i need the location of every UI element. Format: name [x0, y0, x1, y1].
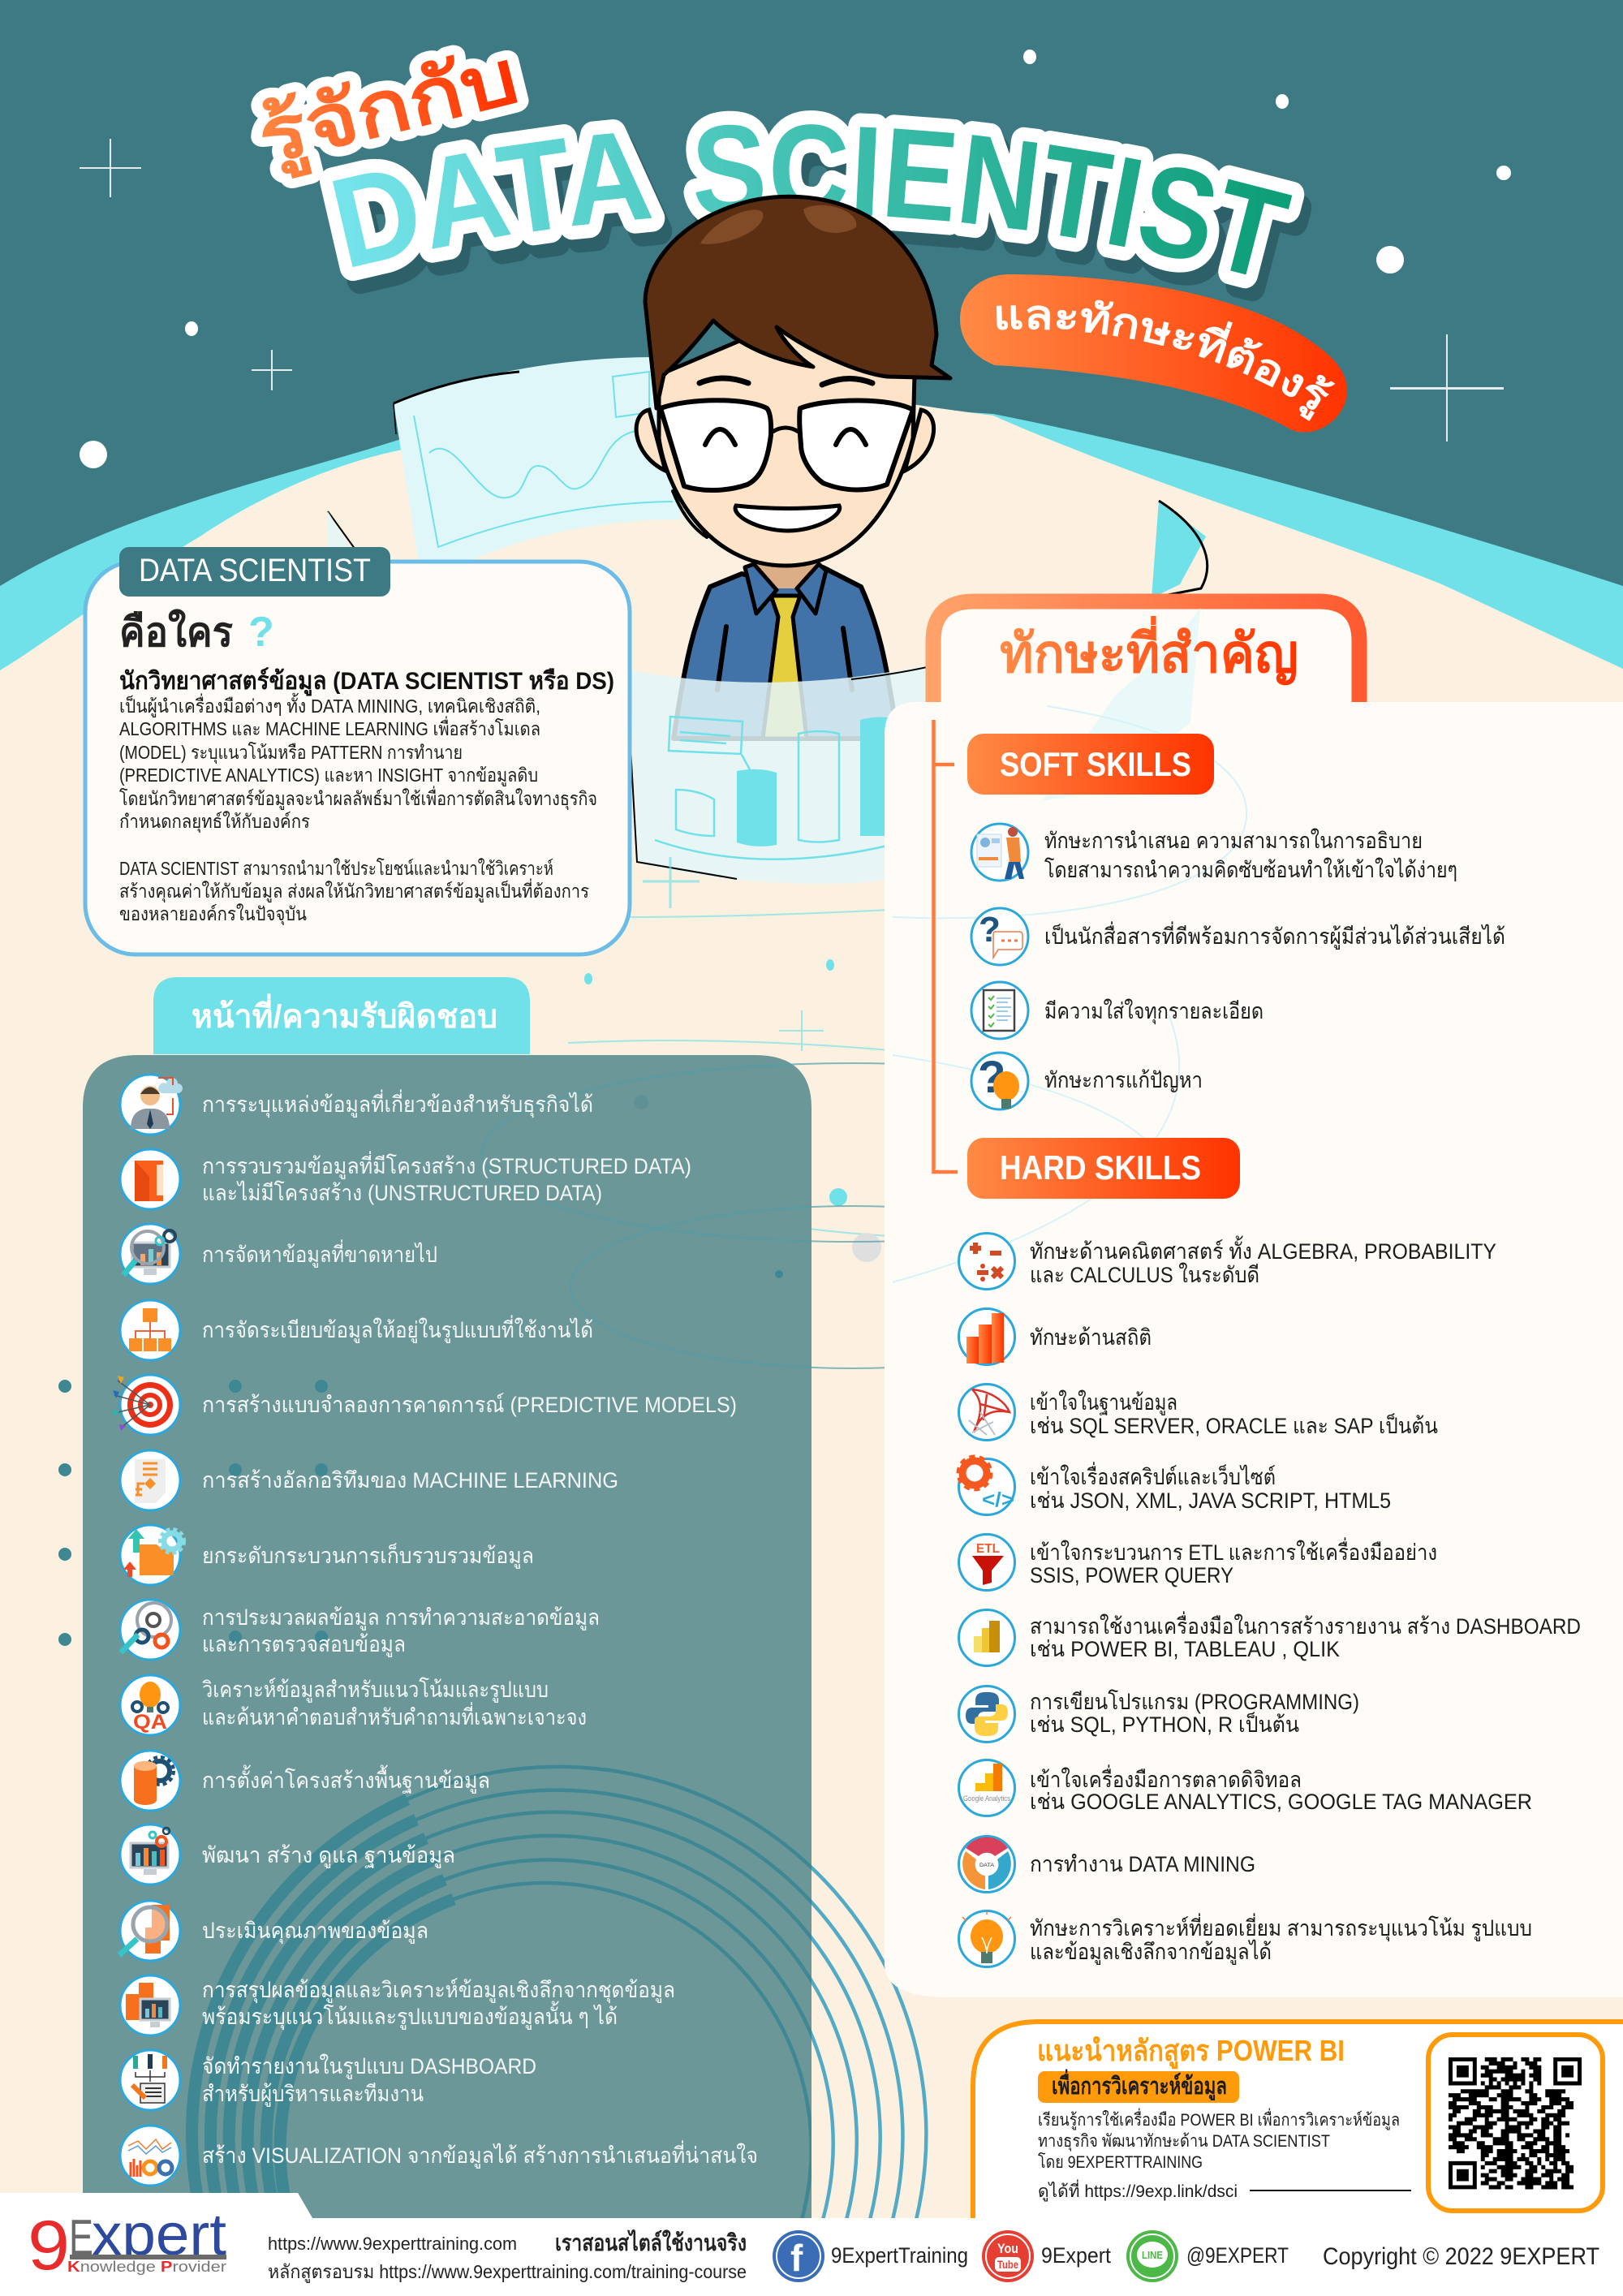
- thin ellipses: [482, 1063, 1222, 1368]
- panel: who is a data scientist: [85, 547, 630, 954]
- body text: DATA SCIENTIST สามารถนำมาใช้ประโยชน์และนำมาใช้วิเคราะห์: [119, 858, 553, 879]
- text: presentation skill: [1044, 828, 1457, 882]
- duty 13: การสรุปผลข้อมูลและวิเคราะห์ข้อมูลเชิงลึกจากชุดข้อมูล: [202, 1977, 675, 2004]
- body text: (MODEL) ระบุแนวโน้มหรือ PATTERN การทำนาย: [119, 742, 463, 764]
- promo text: [1038, 2108, 1400, 2202]
- character: data scientist: [636, 196, 950, 739]
- collar: [745, 564, 826, 614]
- youtube: You: [997, 2241, 1018, 2256]
- text: ETL: SSIS, POWER QUERY: [1030, 1563, 1233, 1587]
- panel: who is a data scientist: DATA SCIENTIST: [139, 553, 371, 588]
- soft skills pill: [967, 734, 1214, 795]
- duty 5: การสร้างแบบจำลองการคาดการณ์ (PREDICTIVE MODELS): [202, 1392, 737, 1417]
- duty 7: ยกระดับกระบวนการเก็บรวบรวมข้อมูล: [202, 1541, 534, 1569]
- facebook: 9ExpertTraining: [831, 2243, 968, 2268]
- duty 2: และไม่มีโครงสร้าง (UNSTRUCTURED DATA): [202, 1181, 602, 1205]
- duty 5: [113, 1375, 737, 1435]
- tag: [119, 547, 390, 597]
- text: digital marketing: [1030, 1764, 1532, 1814]
- icon: statistics bars: [959, 1308, 1014, 1365]
- logo: xpert: [92, 2203, 226, 2268]
- text: script: เข้าใจเรื่องสคริปต์และเว็บไซต์: [1030, 1462, 1276, 1489]
- text: script: เช่น JSON, XML, JAVA SCRIPT, HTML5: [1030, 1488, 1391, 1513]
- duty 14: [120, 2050, 536, 2110]
- soft skills pill: SOFT SKILLS: [1000, 745, 1191, 783]
- bars: [737, 769, 777, 846]
- duty 7: [120, 1525, 534, 1585]
- stars and dots: [80, 50, 1511, 468]
- panel: Power BI course promo: เพื่อการวิเคราะห์ข้อมูล: [1052, 2069, 1227, 2100]
- icon: light bulb: [959, 1910, 1014, 1967]
- shirt: [674, 567, 898, 739]
- note: [655, 717, 925, 859]
- promo text: ดูได้ที่ https://9exp.link/dsci: [1038, 2179, 1238, 2202]
- title: DATA SCIENTIST: SCIENTIST: [683, 110, 1305, 289]
- text: database: [1030, 1389, 1438, 1438]
- icon: python: [959, 1686, 1014, 1742]
- eyes and brows: [705, 429, 866, 445]
- hair: [645, 196, 950, 408]
- icon: ETL funnel: ETL: [976, 1542, 1000, 1556]
- nose bridge: [773, 428, 799, 432]
- pale glass reflection: [893, 608, 1246, 1282]
- youtube: Tube: [997, 2258, 1018, 2271]
- subheading: นักวิทยาศาสตร์ข้อมูล (DATA SCIENTIST หรือ DS): [119, 667, 614, 696]
- duty 4: [120, 1300, 593, 1360]
- logo: 9: [28, 2207, 70, 2285]
- sleeves: [717, 627, 852, 690]
- hard skills pill: [967, 1138, 1240, 1199]
- icon: gear code: </>: [982, 1488, 1014, 1511]
- hard skills pill: HARD SKILLS: [1000, 1148, 1201, 1187]
- text: programming: [1030, 1690, 1359, 1737]
- logo: Knowledge Provider: [67, 2259, 226, 2275]
- duty 6: [120, 1450, 618, 1510]
- ribbon: และทักษะที่ต้องรู้: และทักษะที่ต้องรู้: [997, 300, 1336, 421]
- duty 14: สำหรับผู้บริหารและทีมงาน: [202, 2082, 424, 2107]
- rings on teal: [407, 1764, 812, 2218]
- footer: [0, 2193, 1623, 2296]
- face: [659, 321, 915, 566]
- duty 2: การรวบรวมข้อมูลที่มีโครงสร้าง (STRUCTURED DATA): [202, 1151, 691, 1179]
- text: data mining: การทำงาน DATA MINING: [1030, 1852, 1255, 1876]
- text: database: เช่น SQL SERVER, ORACLE และ SAP เป็นต้น: [1030, 1411, 1438, 1438]
- icon: Power BI: [959, 1610, 1014, 1665]
- icon: question bulb: ?: [978, 1051, 1005, 1102]
- text: ETL: เข้าใจกระบวนการ ETL และการใช้เครื่องมืออย่าง: [1030, 1537, 1437, 1565]
- text: analytical skills: และข้อมูลเชิงลึกจากข้อมูลได้: [1030, 1940, 1272, 1965]
- youtube: 9Expert: [1041, 2243, 1111, 2268]
- text: digital marketing: เช่น GOOGLE ANALYTICS, GOOGLE TAG MANAGER: [1030, 1790, 1532, 1814]
- title: DATA SCIENTIST: DATA: [347, 136, 672, 294]
- text: ETL: [1030, 1537, 1437, 1587]
- facebook: f: [790, 2237, 803, 2279]
- text: statistics: ทักษะด้านสถิติ: [1030, 1325, 1152, 1350]
- duty 15: สร้าง VISUALIZATION จากข้อมูลได้ สร้างการนำเสนอที่น่าสนใจ: [202, 2140, 758, 2169]
- icon: SQL server: [959, 1385, 1014, 1440]
- decorative thin lines: [568, 857, 1242, 1238]
- duty 10: [120, 1751, 490, 1811]
- text: math: [1030, 1235, 1496, 1287]
- glasses: [661, 400, 913, 490]
- cyan dome: [0, 405, 1623, 730]
- body text: ของหลายองค์กรในปัจจุบัน: [119, 903, 307, 925]
- promo text: โดย 9EXPERTTRAINING: [1038, 2152, 1203, 2172]
- duties panel with rings: [58, 1055, 1222, 2220]
- facebook: [773, 2230, 968, 2282]
- copyright: Copyright © 2022 9EXPERT: [1323, 2243, 1599, 2270]
- icon: Google Analytics: Google Analytics: [963, 1794, 1010, 1803]
- body text: โดยนักวิทยาศาสตร์ข้อมูลจะนำผลลัพธ์มาใช้เพื่อการตัดสินใจทางธุรกิจ: [119, 786, 597, 810]
- text: reports: สามารถใช้งานเครื่องมือในการสร้างรายงาน สร้าง DASHBOARD: [1030, 1611, 1581, 1639]
- icon: notebook: [971, 982, 1028, 1039]
- text: digital marketing: เข้าใจเครื่องมือการตลาดดิจิทอล: [1030, 1764, 1302, 1792]
- promo title: แนะนำหลักสูตร POWER BI: [1037, 2034, 1345, 2070]
- duty 12: ประเมินคุณภาพของข้อมูล: [202, 1919, 428, 1945]
- duty 4: การจัดระเบียบข้อมูลให้อยู่ในรูปแบบที่ใช้งานได้: [202, 1315, 593, 1343]
- QR box: [1428, 2035, 1603, 2211]
- duty 8: และการตรวจสอบข้อมูล: [202, 1632, 406, 1657]
- glass chart overlay: [631, 662, 941, 884]
- duty 2: [120, 1149, 691, 1209]
- thick ring arcs: [192, 1799, 454, 2220]
- heading: คือใคร: [119, 609, 233, 655]
- promo text: ทางธุรกิจ พัฒนาทักษะด้าน DATA SCIENTIST: [1038, 2132, 1330, 2152]
- logo: [28, 2203, 226, 2285]
- skills body panel: [885, 702, 1623, 1997]
- logo: E: [69, 2210, 93, 2266]
- icon: gear code: [958, 1457, 1014, 1514]
- duty 12: [119, 1901, 428, 1961]
- icon: question speech: [971, 908, 1028, 965]
- decorative dots on cream: [584, 959, 881, 1262]
- promo button: [1038, 2071, 1239, 2103]
- icon: data mining: [959, 1836, 1014, 1893]
- title: DATA SCIENTIST: SCIENTIST: [693, 138, 1311, 302]
- duty 8: การประมวลผลข้อมูล การทำความสะอาดข้อมูล: [202, 1605, 600, 1630]
- icon: data mining: DATA: [979, 1863, 994, 1868]
- duty 11: [120, 1824, 455, 1885]
- text: programming: การเขียนโปรแกรม (PROGRAMMING): [1030, 1690, 1359, 1714]
- hair highlights: [700, 205, 856, 244]
- text: script: [1030, 1462, 1391, 1513]
- website links: หลักสูตรอบรม https://www.9experttraining.com/training-course: [268, 2261, 747, 2283]
- icon: presenter: [971, 824, 1028, 881]
- body text: ALGORITHMS และ MACHINE LEARNING เพื่อสร้างโมเดล: [119, 716, 540, 739]
- duty 9: QA: [133, 1711, 167, 1734]
- title: DATA SCIENTIST: DATA: [320, 119, 665, 281]
- text: programming: เช่น SQL, PYTHON, R เป็นต้น: [1030, 1710, 1299, 1737]
- icon: question speech: ?: [979, 910, 1001, 950]
- duty 9: และค้นหาคำตอบสำหรับคำถามที่เฉพาะเจาะจง: [202, 1702, 587, 1730]
- text: math: และ CALCULUS ในระดับดี: [1030, 1262, 1259, 1287]
- dots: [58, 1095, 783, 1646]
- panel: Power BI course promo: [973, 2022, 1623, 2218]
- body text: เป็นผู้นำเครื่องมือต่างๆ ทั้ง DATA MINING, เทคนิคเชิงสถิติ,: [119, 693, 540, 717]
- duty 14: จัดทำรายงานในรูปแบบ DASHBOARD: [202, 2053, 536, 2079]
- duty 9: [120, 1675, 587, 1735]
- body text: [119, 693, 597, 925]
- text: attention to detail: มีความใส่ใจทุกรายละเอียด: [1044, 998, 1264, 1025]
- question mark: ?: [248, 609, 274, 656]
- ears: [636, 410, 934, 471]
- duty 11: พัฒนา สร้าง ดูแล ฐานข้อมูล: [202, 1843, 455, 1868]
- tab: duties heading: [153, 977, 530, 1054]
- website links: เราสอนสไตล์ใช้งานจริง: [555, 2229, 747, 2255]
- body text: กำหนดกลยุทธ์ให้กับองค์กร: [119, 811, 310, 833]
- duty 1: [120, 1075, 593, 1135]
- website links: https://www.9experttraining.com: [268, 2234, 517, 2254]
- body text: สร้างคุณค่าให้กับข้อมูล ส่งผลให้นักวิทยาศาสตร์ข้อมูลเป็นที่ต้องการ: [119, 878, 589, 902]
- line: LINE: [1142, 2249, 1163, 2261]
- icon: question bulb: [971, 1051, 1028, 1109]
- duty 1: การระบุแหล่งข้อมูลที่เกี่ยวข้องสำหรับธุรกิจได้: [202, 1089, 593, 1118]
- text: presentation skill: ทักษะการนำเสนอ ความสามารถในการอธิบาย: [1044, 828, 1423, 853]
- text: math: ทักษะด้านคณิตศาสตร์ ทั้ง ALGEBRA, PROBABILITY: [1030, 1235, 1496, 1264]
- skills heading: ทักษะที่สำคัญ: [1000, 615, 1298, 685]
- promo text: เรียนรู้การใช้เครื่องมือ POWER BI เพื่อการวิเคราะห์ข้อมูล: [1038, 2108, 1400, 2130]
- duty 8: [120, 1600, 600, 1660]
- title: รู้จักกับ: รู้จักกับ: [250, 36, 527, 184]
- duty 3: [120, 1224, 437, 1284]
- skills heading frame: [933, 601, 1359, 702]
- text: presentation skill: โดยสามารถนำความคิดซับซ้อนทำให้เข้าใจได้ง่ายๆ: [1044, 857, 1457, 882]
- icon: Google Analytics: [959, 1760, 1014, 1816]
- duty 9: วิเคราะห์ข้อมูลสำหรับแนวโน้มและรูปแบบ: [202, 1677, 549, 1703]
- title: DATA SCIENTIST: DATA: [333, 133, 652, 268]
- tie: [763, 596, 807, 739]
- title: รู้จักกับ: รู้จักกับ: [250, 36, 527, 184]
- website links: [268, 2229, 747, 2283]
- duty 10: การตั้งค่าโครงสร้างพื้นฐานข้อมูล: [202, 1764, 490, 1794]
- title: DATA SCIENTIST: [320, 110, 1311, 302]
- neck: [754, 564, 817, 588]
- text: reports: เช่น POWER BI, TABLEAU , QLIK: [1030, 1637, 1340, 1661]
- rings on cream: [812, 1865, 928, 2218]
- text: problem solving: ทักษะการแก้ปัญหา: [1044, 1068, 1203, 1092]
- QR code: [1449, 2057, 1582, 2189]
- line: [1126, 2230, 1289, 2282]
- icon: ETL funnel: [959, 1534, 1014, 1591]
- line: @9EXPERT: [1186, 2243, 1289, 2268]
- glass chart panel: [328, 357, 682, 601]
- body text: (PREDICTIVE ANALYTICS) และหา INSIGHT จากข้อมูลดิบ: [119, 765, 538, 786]
- small glass flag: [1152, 501, 1208, 598]
- title: DATA SCIENTIST: SCIENTIST: [695, 124, 1292, 274]
- duty 15: [120, 2126, 758, 2186]
- duty 13: พร้อมระบุแนวโน้มและรูปแบบของข้อมูลนั้น ๆ ได้: [202, 2001, 618, 2031]
- text: analytical skills: ทักษะการวิเคราะห์ที่ยอดเยี่ยม สามารถระบุแนวโน้ม รูปแบบ: [1030, 1913, 1532, 1942]
- icon: math: [959, 1234, 1014, 1289]
- cheek line: [673, 491, 707, 537]
- tab: duties heading: หน้าที่/ความรับผิดชอบ: [192, 993, 497, 1035]
- duty 3: การจัดหาข้อมูลที่ขาดหายไป: [202, 1239, 437, 1268]
- text: communicator: เป็นนักสื่อสารที่ดีพร้อมการจัดการผู้มีส่วนได้ส่วนเสียได้: [1044, 921, 1505, 950]
- smile: [735, 506, 840, 531]
- connector lines: [933, 720, 958, 1172]
- text: reports: [1030, 1611, 1581, 1661]
- duty 6: การสร้างอัลกอริทึมของ MACHINE LEARNING: [202, 1468, 618, 1493]
- text: analytical skills: [1030, 1913, 1532, 1965]
- youtube: [982, 2230, 1111, 2282]
- duty 13: [120, 1975, 675, 2035]
- text: database: เข้าใจในฐานข้อมูล: [1030, 1389, 1177, 1415]
